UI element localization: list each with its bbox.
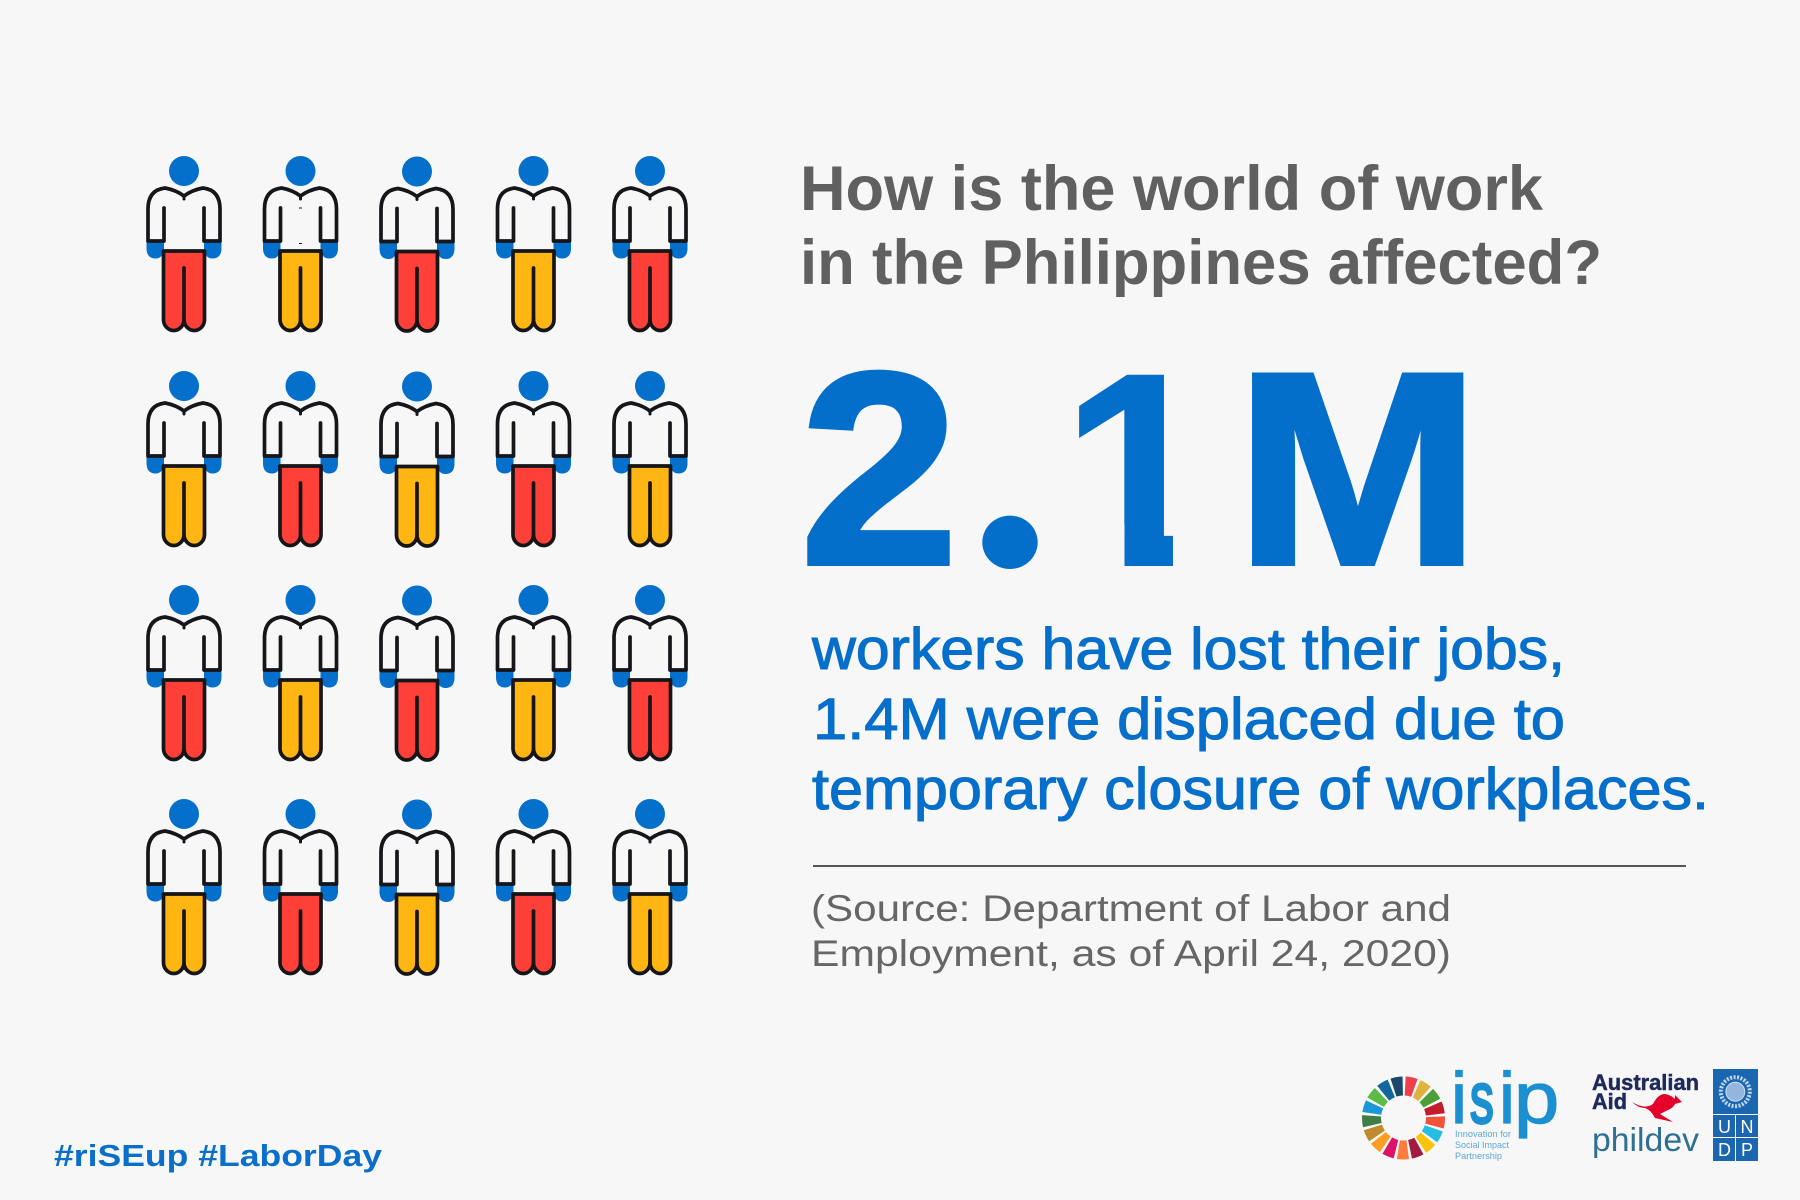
worker row 4 — [146, 799, 688, 974]
heading: How is the world of work — [800, 154, 1544, 224]
logo: isip wordmark: Partnership — [1455, 1151, 1502, 1162]
logo: Australian Aid — [1592, 1070, 1699, 1122]
logo: UNDP — [1713, 1069, 1758, 1161]
description text: workers have lost their jobs, — [811, 617, 1565, 682]
divider — [813, 865, 1686, 867]
logo: UNDP: U — [1718, 1117, 1731, 1137]
logo: UNDP: P — [1741, 1140, 1753, 1160]
heading — [800, 154, 1602, 298]
logo: isip wordmark: Social Impact — [1455, 1140, 1509, 1151]
big number: M — [1235, 316, 1480, 622]
big number: 1 — [1061, 317, 1214, 624]
logo: isip wordmark: Innovation for — [1455, 1129, 1511, 1140]
icon: kangaroo — [1632, 1094, 1682, 1122]
hashtags: #riSEup #LaborDay — [54, 1138, 383, 1173]
worker row 2 — [146, 371, 688, 546]
pictogram grid of workers — [146, 156, 688, 974]
logo: UNDP: N — [1740, 1117, 1754, 1137]
logo: isip SDG ring — [1358, 1073, 1449, 1163]
big number decimal dot — [982, 516, 1038, 569]
heading: in the Philippines affected? — [800, 228, 1602, 298]
logo: isip wordmark: i — [1499, 1059, 1515, 1139]
cover for the foot of the numeral one — [1046, 524, 1234, 572]
big number — [800, 316, 1480, 624]
logo: UNDP: D — [1718, 1140, 1731, 1160]
logo: phildev: phildev — [1592, 1121, 1700, 1158]
logo: isip wordmark — [1451, 1058, 1559, 1162]
description text: 1.4M were displaced due to — [813, 687, 1565, 752]
worker row 1 — [146, 156, 688, 331]
worker row 3 — [146, 585, 688, 760]
source note — [811, 888, 1451, 974]
source note: Employment, as of April 24, 2020) — [811, 933, 1451, 974]
logo: isip wordmark: p — [1514, 1058, 1559, 1139]
logo: Australian Aid: Australian — [1592, 1070, 1699, 1095]
source note: (Source: Department of Labor and — [811, 888, 1451, 929]
description text: temporary closure of workplaces. — [812, 757, 1709, 822]
logo: isip wordmark: s — [1470, 1058, 1494, 1138]
big number: 2 — [800, 316, 958, 622]
description text — [811, 617, 1709, 822]
logo: Australian Aid: Aid — [1592, 1089, 1627, 1114]
logo: isip wordmark: i — [1451, 1059, 1467, 1139]
